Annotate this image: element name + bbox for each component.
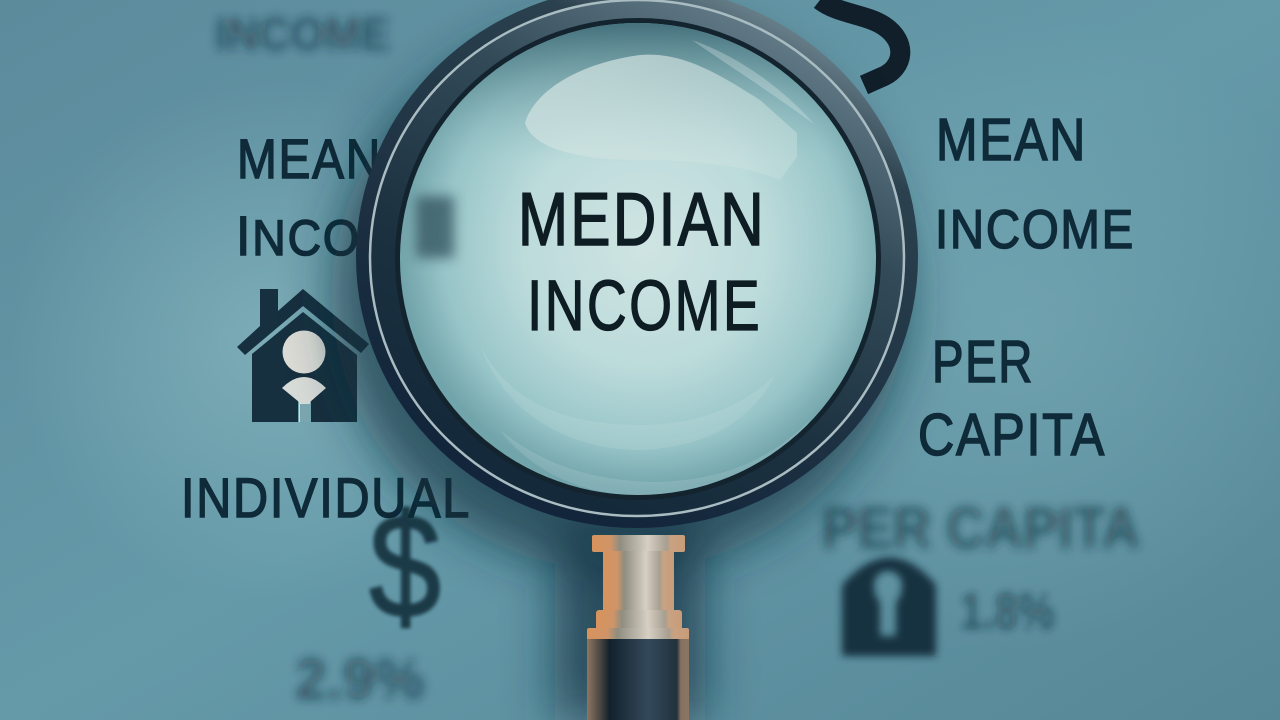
lens text: median income: INCOME bbox=[527, 267, 762, 346]
label: per capita right: PER bbox=[932, 329, 1034, 395]
label: mean income right: INCOME bbox=[935, 198, 1135, 260]
lens text: median income bbox=[518, 177, 766, 346]
label: mean income right bbox=[935, 107, 1135, 260]
blurred value: 2.9%: 2.9% bbox=[295, 647, 425, 712]
label: per capita right bbox=[918, 329, 1106, 468]
blurred value: 1.8%: 1.8% bbox=[960, 583, 1055, 641]
label: individual: INDIVIDUAL bbox=[181, 466, 471, 529]
blurred label: income top: INCOME bbox=[215, 8, 390, 60]
handle bbox=[587, 535, 689, 720]
blurred dollar icon: $ bbox=[369, 484, 441, 649]
lens glass bbox=[400, 20, 876, 496]
dollar sign top bbox=[820, 0, 900, 85]
blurred label: per capita: PER CAPITA bbox=[822, 496, 1140, 561]
lens text: median income: MEDIAN bbox=[518, 177, 766, 261]
label: mean income left: INCOME bbox=[236, 204, 434, 267]
label: mean income left: MEAN bbox=[237, 127, 382, 190]
label: mean income left bbox=[236, 127, 434, 267]
magnifying glass bbox=[356, 0, 918, 720]
icon: house with person bbox=[237, 289, 369, 422]
label: mean income right: MEAN bbox=[936, 107, 1087, 173]
label: per capita right: CAPITA bbox=[918, 402, 1106, 468]
magnifier shadow bbox=[332, 19, 908, 720]
blurred icon: house bbox=[842, 558, 936, 656]
lens frame bbox=[356, 0, 918, 528]
